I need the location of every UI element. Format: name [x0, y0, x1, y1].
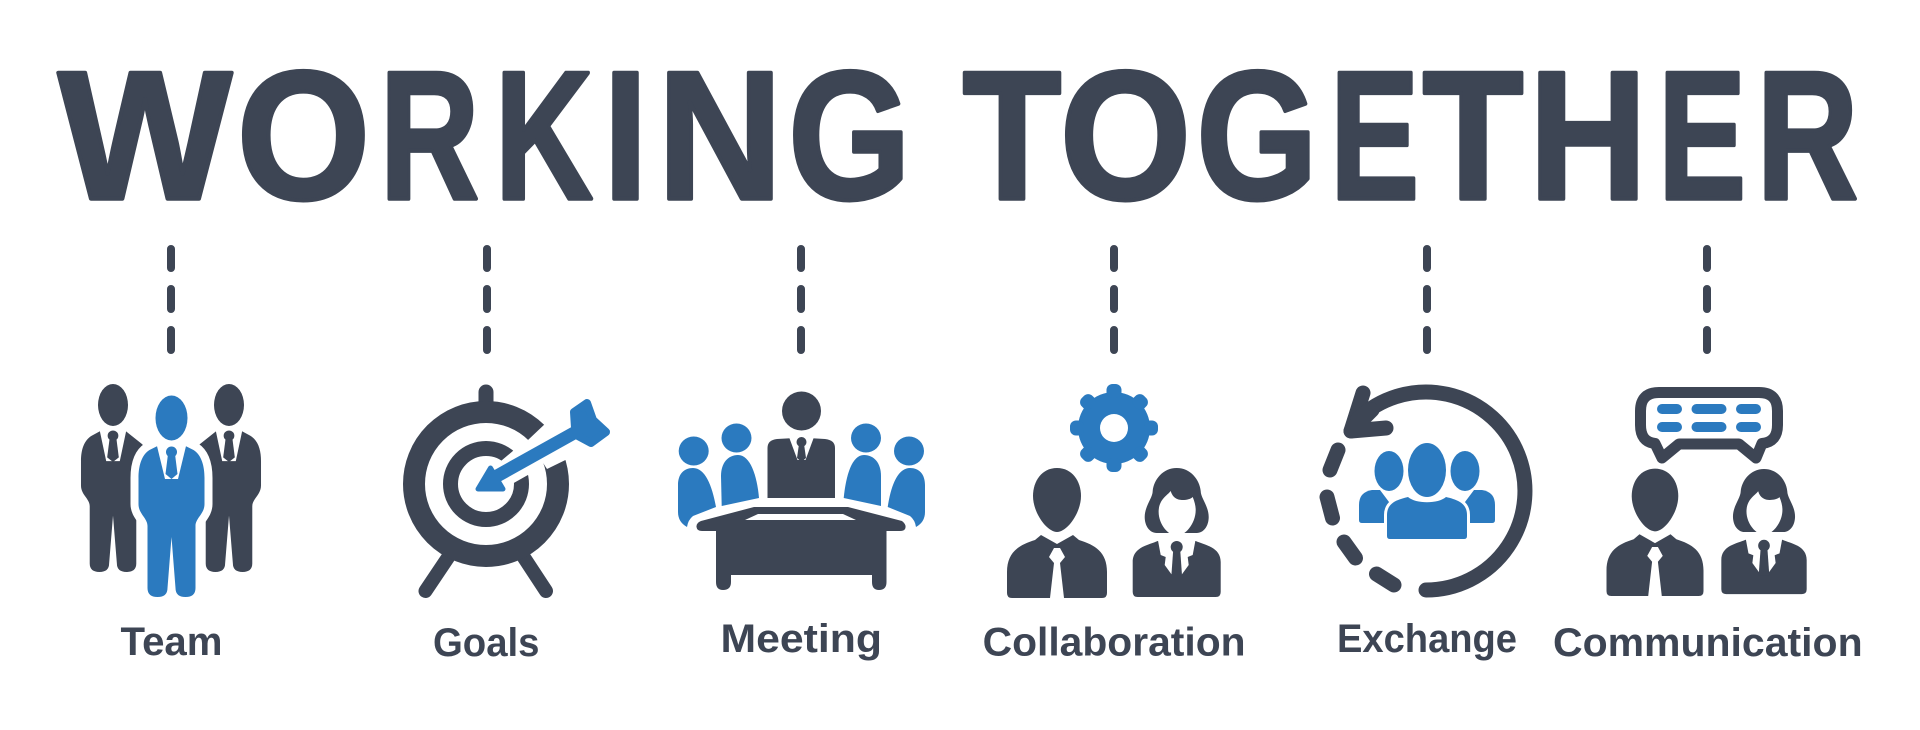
label: collaboration: Collaboration	[983, 621, 1246, 665]
icon: meeting table with people	[678, 392, 925, 590]
title: O	[237, 33, 370, 238]
title: N	[657, 33, 783, 238]
dashed connector: goals	[483, 249, 491, 350]
title: T	[963, 33, 1061, 238]
dashed connector: communication	[1703, 249, 1711, 350]
title: G	[1196, 33, 1318, 238]
title: O	[1060, 33, 1191, 238]
dashed connector: exchange	[1423, 249, 1431, 350]
icon: businessman	[1007, 468, 1107, 598]
panel: collaboration	[983, 249, 1246, 665]
dashed connector: team	[167, 249, 175, 350]
icon: gear	[1070, 384, 1158, 472]
icon: businesswoman	[1133, 468, 1221, 597]
title: G	[788, 33, 911, 238]
icon: businesswoman	[1721, 469, 1807, 594]
title: W	[58, 33, 232, 238]
label: meeting: Meeting	[720, 617, 882, 661]
title: E	[1330, 33, 1419, 238]
icon: speech bubble	[1640, 392, 1778, 458]
panel: meeting	[678, 249, 925, 661]
dashed connector: meeting	[797, 249, 805, 350]
panel: goals	[414, 249, 606, 665]
label: goals: Goals	[433, 621, 540, 665]
dashed connector: collaboration	[1110, 249, 1118, 350]
panel: communication	[1553, 249, 1863, 665]
label: team: Team	[120, 620, 222, 664]
title: H	[1529, 33, 1647, 238]
title: K	[495, 33, 593, 238]
title: T	[1423, 33, 1523, 238]
icon: group of people	[1359, 440, 1495, 539]
panel: team	[81, 249, 261, 664]
label: communication: Communication	[1553, 621, 1863, 665]
icon: circular arrow	[1327, 392, 1525, 590]
title: R	[1757, 33, 1858, 238]
title: R	[380, 33, 479, 238]
icon: team of three people	[81, 384, 261, 597]
label: exchange: Exchange	[1337, 617, 1517, 661]
title: I	[603, 33, 648, 238]
panel: exchange	[1327, 249, 1525, 661]
icon: businessman	[1606, 469, 1704, 596]
title: E	[1658, 33, 1746, 238]
icon: target with arrow	[414, 392, 606, 591]
